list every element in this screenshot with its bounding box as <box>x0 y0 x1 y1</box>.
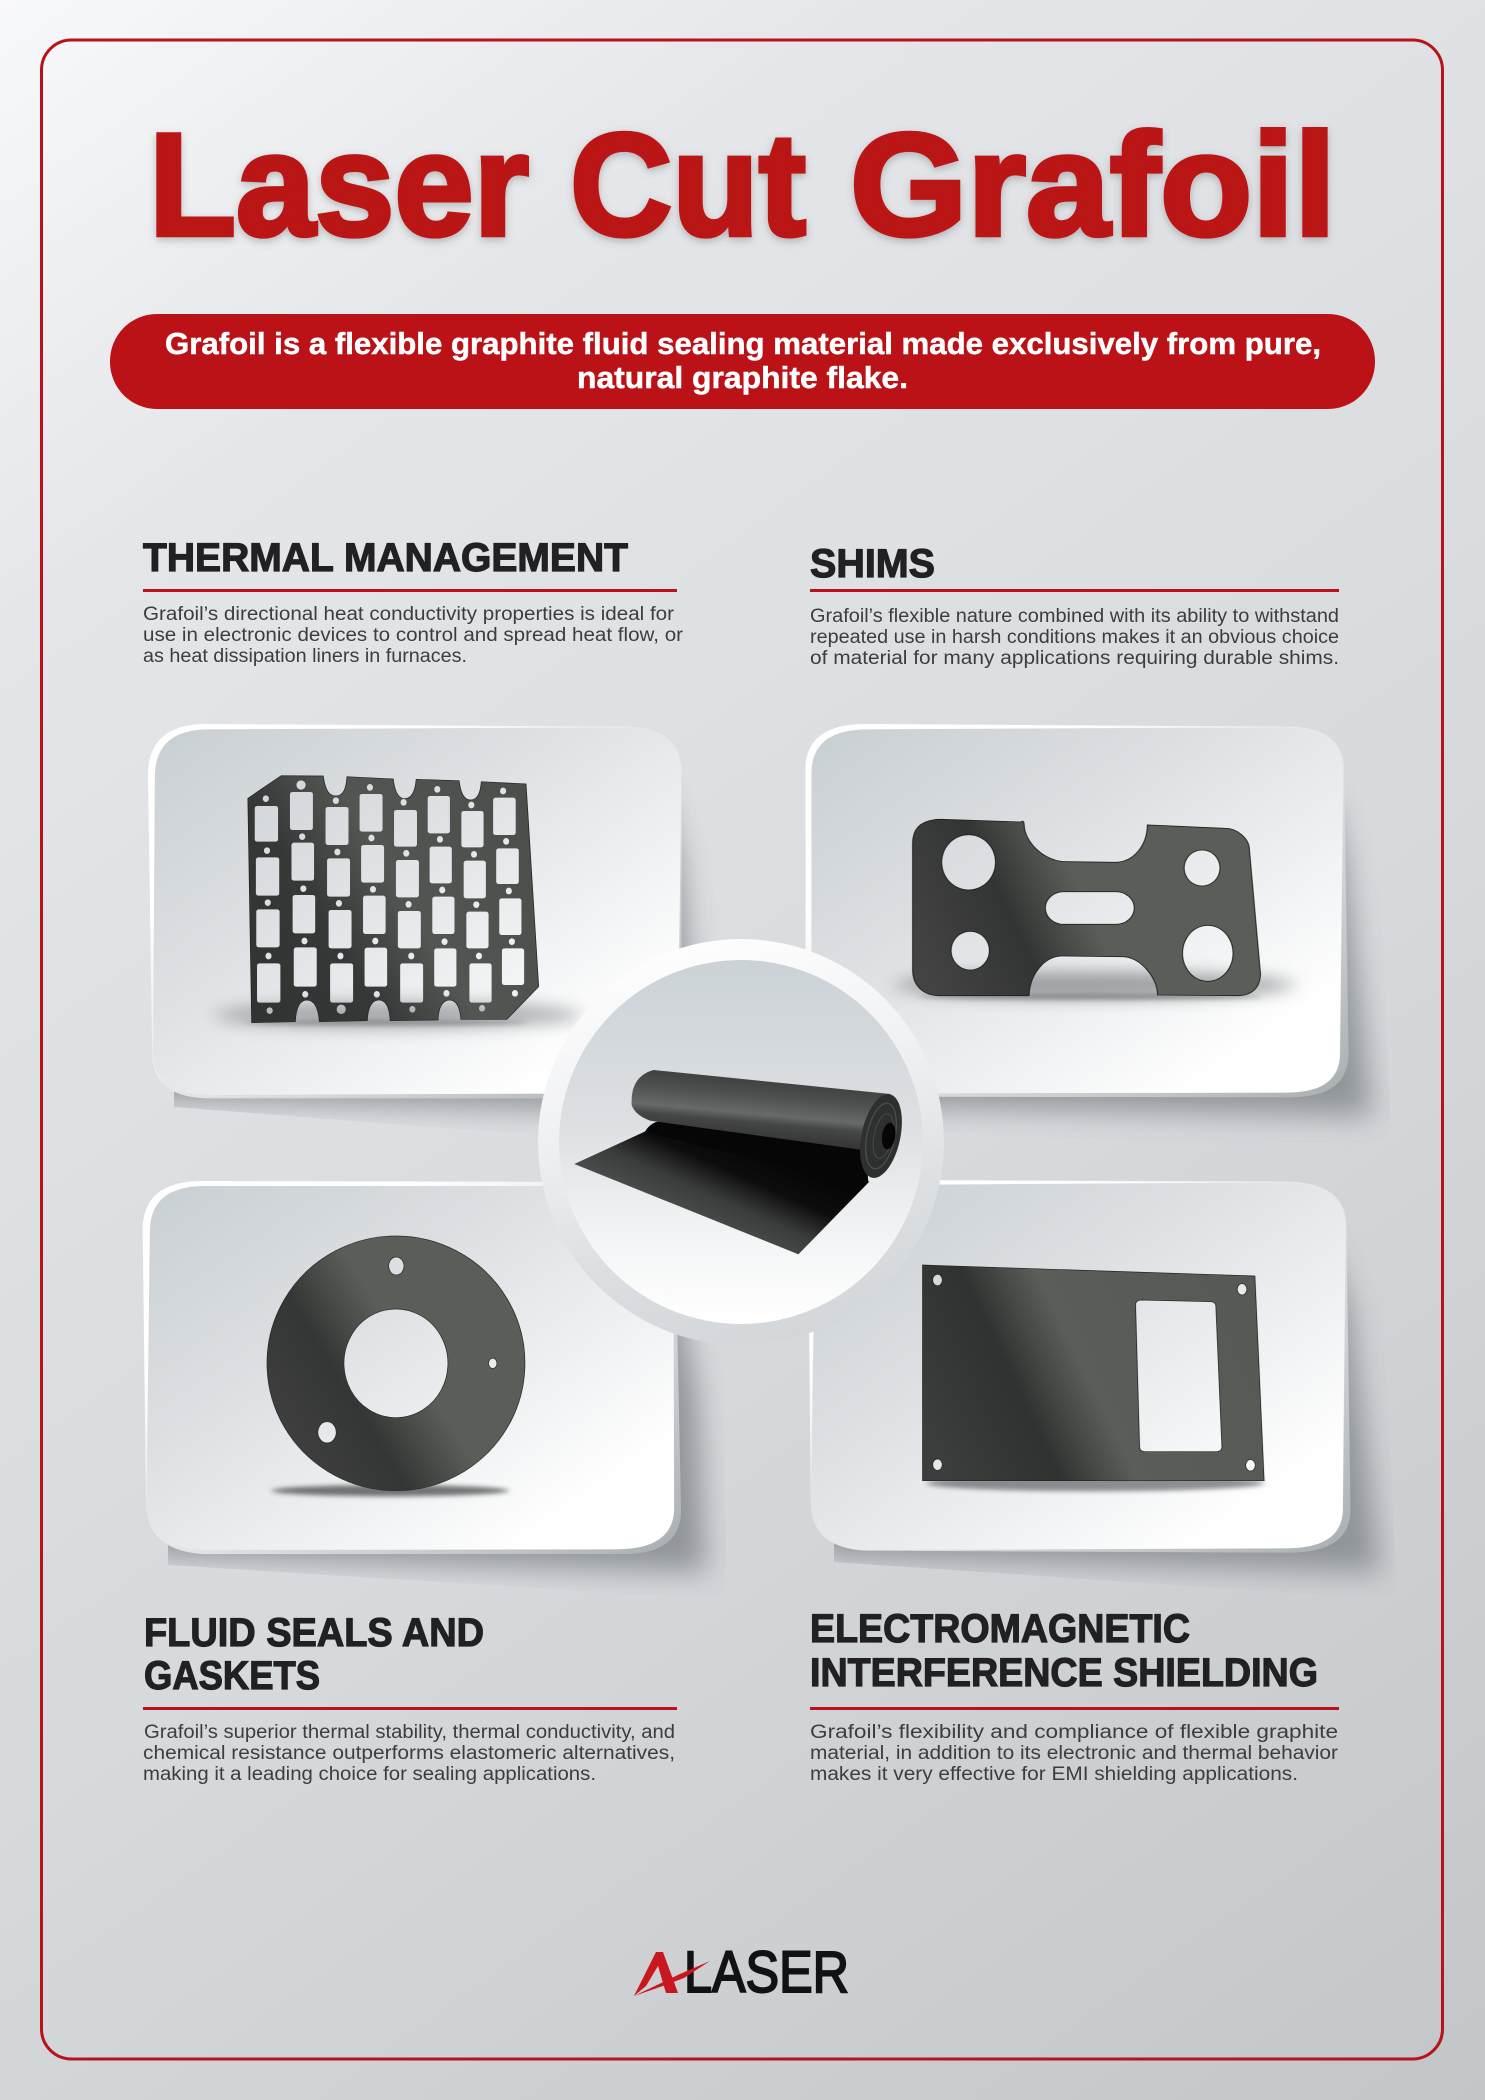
banner pill <box>110 314 1375 409</box>
panel: graphite roll medallion <box>538 939 944 1345</box>
heading: shims: SHIMS <box>810 542 935 586</box>
body: shims: of material for many applications requiring durable shims. <box>810 648 1339 669</box>
panel: shims image <box>805 724 1349 1097</box>
panel: fluid seals text <box>143 1611 677 1785</box>
body: fluid seals: making it a leading choice for sealing applications. <box>143 1764 596 1785</box>
icon: shim part <box>913 819 1260 996</box>
body: thermal management: as heat dissipation liners in furnaces. <box>143 646 467 667</box>
body: fluid seals: chemical resistance outperforms elastomeric alternatives, <box>143 1743 675 1764</box>
body: emi shielding: material, in addition to its electronic and thermal behavior <box>810 1743 1339 1764</box>
title: Laser <box>149 103 529 266</box>
panel: intro banner <box>110 314 1375 409</box>
icon: perforated graphite sheet <box>248 776 539 1023</box>
panel: shims text <box>810 542 1339 669</box>
medallion disc <box>559 960 923 1324</box>
body: shims: repeated use in harsh conditions makes it an obvious choice <box>810 627 1339 648</box>
body: emi shielding: Grafoil’s flexibility and compliance of flexible graphite <box>810 1722 1338 1743</box>
body: emi shielding: makes it very effective for EMI shielding applications. <box>810 1764 1298 1785</box>
body: thermal management: Grafoil’s directional heat conductivity properties is ideal for <box>143 604 675 625</box>
banner text: natural graphite flake. <box>577 360 908 395</box>
panel: fluid seals image <box>143 1181 681 1554</box>
heading: fluid seals and gaskets: GASKETS <box>144 1654 320 1698</box>
heading: fluid seals and gaskets: FLUID SEALS AND <box>144 1611 484 1655</box>
body: shims: Grafoil’s flexible nature combined with its ability to withstand <box>810 606 1339 627</box>
heading: electromagnetic interference shielding: INTERFERENCE SHIELDING <box>810 1651 1318 1695</box>
panel: emi shielding image <box>808 1180 1350 1553</box>
panel: emi shielding text <box>810 1607 1339 1785</box>
title: Grafoil <box>850 103 1336 266</box>
icon: gasket ring <box>267 1236 525 1491</box>
logo: ALASER <box>634 1940 849 2005</box>
heading: thermal management: THERMAL MANAGEMENT <box>143 536 628 580</box>
medallion ring <box>538 939 944 1345</box>
body: fluid seals: Grafoil’s superior thermal stability, thermal conductivity, and <box>144 1722 675 1743</box>
icon: logo red A swoosh <box>634 1952 710 1996</box>
icon: graphite roll <box>574 1070 909 1254</box>
panel: thermal management image <box>148 724 682 1098</box>
banner text: Grafoil is a flexible graphite fluid sealing material made exclusively from pure, <box>165 326 1321 361</box>
body: thermal management: use in electronic devices to control and spread heat flow, or <box>143 625 684 646</box>
panel: thermal management text <box>143 536 684 667</box>
logo wordmark: LASER <box>684 1940 849 2005</box>
heading: electromagnetic interference shielding: ELECTROMAGNETIC <box>810 1607 1190 1651</box>
card shadows <box>150 800 1380 1572</box>
icon: emi shield plate <box>923 1265 1264 1481</box>
title: Cut <box>570 103 806 266</box>
